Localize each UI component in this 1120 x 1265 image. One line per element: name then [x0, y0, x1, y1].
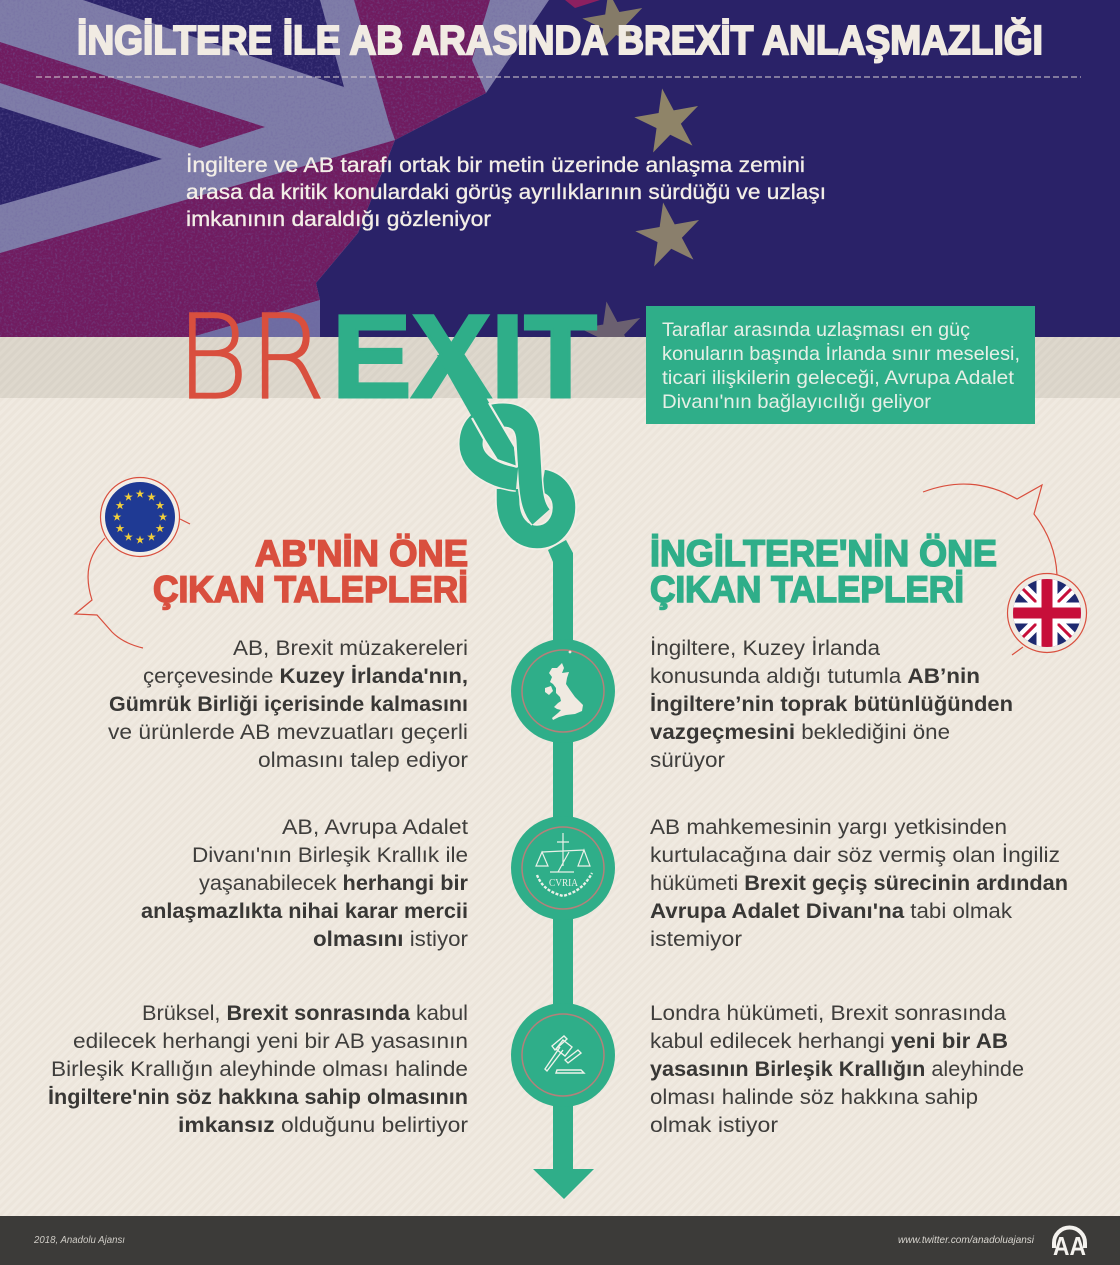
- footer: www.twitter.com/anadoluajansi: [898, 1234, 1035, 1246]
- BREXIT wordmark: [176, 289, 597, 426]
- left paragraph 3: Brüksel, Brexit sonrasında kabul: [142, 1002, 468, 1025]
- right paragraph 3: kabul edilecek herhangi yeni bir AB: [650, 1030, 1008, 1053]
- star 1: [582, 0, 642, 46]
- EU flag badge: [75, 478, 190, 648]
- right heading: İNGİLTERE'NİN ÖNE: [650, 533, 997, 574]
- intro text: İngiltere ve AB tarafı ortak bir metin üzerinde anlaşma zemini: [186, 153, 805, 177]
- right paragraph 1: [650, 637, 1013, 772]
- knot upper loop: [471, 415, 541, 517]
- right paragraph 1: İngiltere, Kuzey İrlanda: [650, 637, 880, 660]
- left paragraph 2: yaşanabilecek herhangi bir: [199, 872, 468, 895]
- left paragraph 1: AB, Brexit müzakereleri: [233, 637, 468, 660]
- left paragraph 1: çerçevesinde Kuzey İrlanda'nın,: [143, 665, 468, 688]
- shaft and arrowhead: [533, 540, 594, 1199]
- footer: 2018, Anadolu Ajansı: [33, 1235, 125, 1246]
- left paragraph 3: İngiltere'nin söz hakkına sahip olmasının: [48, 1086, 468, 1109]
- left paragraph 1: Gümrük Birliği içerisinde kalmasını: [109, 693, 468, 716]
- right paragraph 2: Avrupa Adalet Divanı'na tabi olmak: [650, 900, 1013, 923]
- callout box: Divanı'nın bağlayıcılığı geliyor: [662, 391, 932, 413]
- left paragraph 1: ve ürünlerde AB mevzuatları geçerli: [108, 721, 468, 744]
- left paragraph 3: Birleşik Krallığın aleyhinde olması halinde: [51, 1058, 468, 1081]
- right paragraph 1: vazgeçmesini beklediğini öne: [650, 721, 950, 744]
- right paragraph 1: konusunda aldığı tutumla AB’nin: [650, 665, 980, 688]
- left paragraph 3: edilecek herhangi yeni bir AB yasasının: [73, 1030, 468, 1053]
- left paragraph 2: AB, Avrupa Adalet: [282, 816, 468, 839]
- right paragraph 2: [650, 816, 1068, 951]
- callout box: ticari ilişkilerin geleceği, Avrupa Adalet: [662, 367, 1015, 389]
- right paragraph 2: hükümeti Brexit geçiş sürecinin ardından: [650, 872, 1068, 895]
- right paragraph 3: Londra hükümeti, Brexit sonrasında: [650, 1002, 1006, 1025]
- intro text: arasa da kritik konulardaki görüş ayrılıklarının sürdüğü ve uzlaşı: [186, 180, 826, 204]
- left paragraph 1: olmasını talep ediyor: [258, 749, 468, 772]
- left paragraph 2: anlaşmazlıkta nihai karar mercii: [141, 900, 468, 923]
- left paragraph 2: Divanı'nın Birleşik Krallık ile: [192, 844, 468, 867]
- intro text: imkanının daraldığı gözleniyor: [186, 207, 491, 231]
- left heading: ÇIKAN TALEPLERİ: [153, 569, 468, 610]
- circle icon: court of justice: CVRIA: [549, 878, 578, 889]
- circle icon: court of justice: [511, 816, 615, 920]
- left heading: AB'NİN ÖNE: [255, 533, 468, 574]
- right paragraph 3: yasasının Birleşik Krallığın aleyhinde: [650, 1058, 1024, 1081]
- right paragraph 2: kurtulacağına dair söz vermiş olan İngiliz: [650, 844, 1060, 867]
- left heading: [153, 533, 468, 610]
- left column text: [48, 637, 468, 1137]
- left paragraph 1: [108, 637, 468, 772]
- hero background: flags: [0, 0, 1120, 364]
- circle icon: gavel: [511, 1003, 615, 1107]
- UK flag badge: [923, 484, 1086, 655]
- BREXIT wordmark: BR: [176, 289, 326, 426]
- Anadolu Agency logo: AA: [1053, 1231, 1086, 1261]
- knot diagonal strand: [437, 355, 516, 466]
- callout box: Taraflar arasında uzlaşması en güç: [662, 319, 970, 341]
- right heading: ÇIKAN TALEPLERİ: [650, 569, 964, 610]
- left paragraph 3: [48, 1002, 468, 1137]
- footer: [0, 1216, 1120, 1265]
- right paragraph 1: İngiltere’nin toprak bütünlüğünden: [650, 693, 1013, 716]
- intro text: [186, 153, 826, 231]
- callout box: konuların başında İrlanda sınır meselesi,: [662, 342, 1020, 365]
- right paragraph 3: olmak istiyor: [650, 1114, 778, 1137]
- right paragraph 1: sürüyor: [650, 749, 725, 772]
- callout box: [646, 306, 1035, 424]
- right paragraph 2: AB mahkemesinin yargı yetkisinden: [650, 816, 1007, 839]
- left paragraph 2: olmasını istiyor: [313, 928, 468, 951]
- knot and timeline arrow: [437, 355, 594, 1199]
- BREXIT wordmark: EXIT: [332, 291, 597, 423]
- circle icon: UK map: [511, 639, 615, 743]
- title: İNGİLTERE İLE AB ARASINDA BREXİT ANLAŞMAZLIĞI: [77, 17, 1043, 63]
- right paragraph 2: istemiyor: [650, 928, 742, 951]
- right paragraph 3: [650, 1002, 1024, 1137]
- right column text: [650, 637, 1068, 1137]
- knot lower loop: [508, 481, 564, 537]
- right heading: [650, 533, 997, 610]
- left paragraph 2: [141, 816, 468, 951]
- right paragraph 3: olması halinde söz hakkına sahip: [650, 1086, 978, 1109]
- left paragraph 3: imkansız olduğunu belirtiyor: [178, 1114, 468, 1137]
